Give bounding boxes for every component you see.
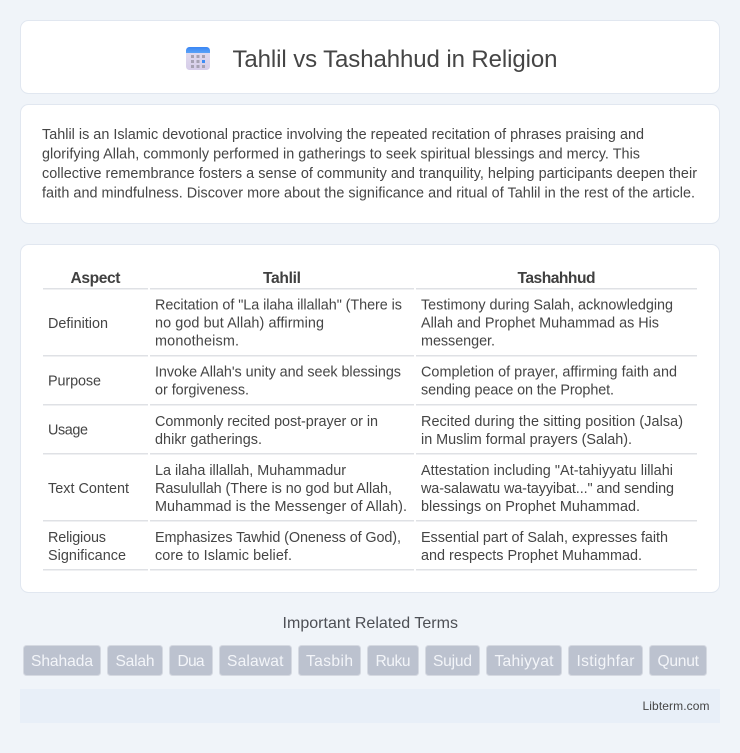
row: Usage: Commonly recited post-prayer or in [155,414,378,430]
intro text [42,127,697,202]
row: Religious Significance: Essential part of Salah, expresses faith [421,530,668,546]
tag: Ruku: Ruku [376,653,410,670]
tag: Salah [108,646,162,676]
tag: Salawat [220,646,292,676]
tag: Istighfar [568,646,642,676]
row: Definition: Allah and Prophet Muhammad as His [421,316,659,332]
row: Usage: dhikr gatherings. [155,432,262,448]
row: Definition: Recitation of "La ilaha illallah" (There is [155,298,402,314]
table header: Tahlil [263,270,301,287]
row: Usage: in Muslim formal prayers (Salah). [421,432,632,448]
footer credit: Libterm.com [642,699,710,713]
table header: Tashahhud [518,270,596,287]
row: Purpose: Completion of prayer, affirming faith and [421,364,677,380]
row: Definition: messenger. [421,334,495,350]
row: Purpose [43,364,697,406]
row: Usage [43,414,697,454]
row: Definition: Definition [48,316,108,332]
footer [20,689,720,723]
row: Text Content: Muhammad is the Messenger of Allah). [155,499,407,515]
tag: Dua: Dua [178,653,205,670]
row: Definition: no god but Allah) affirming [155,316,324,332]
tag: Ruku [368,646,418,676]
table header: Aspect [70,270,120,287]
row: Purpose: sending peace on the Prophet. [421,382,614,398]
panel: comparison table [20,244,720,592]
row: Usage: Recited during the sitting position (Jalsa) [421,414,683,430]
row: Religious Significance [43,530,697,570]
intro text: collective remembrance fosters a sense of community and tranquility, helping participants deepen their [42,166,697,182]
row: Religious Significance: Emphasizes Tawhid (Oneness of God), [155,530,401,546]
intro text: glorifying Allah, commonly performed in gatherings to seek spiritual blessings and mercy. This [42,146,640,162]
tag: Dua [170,646,212,676]
row: Definition: monotheism. [155,334,239,350]
tag: Sujud: Sujud [433,653,472,670]
tag: Qunut: Qunut [658,653,700,670]
row: Religious Significance: Significance [48,548,126,564]
row: Text Content: Rasulullah (There is no god but Allah, [155,481,392,497]
row: Definition: Testimony during Salah, acknowledging [421,298,673,314]
heading: related terms: Important Related Terms [282,615,458,632]
tag: Istighfar: Istighfar [576,653,634,670]
row: Text Content [43,463,697,522]
tag: Salah: Salah [116,653,154,670]
row: Purpose: Purpose [48,374,101,390]
tag: Tahiyyat [486,646,562,676]
row: Text Content: La ilaha illallah, Muhammadur [155,463,346,479]
tag: Tasbih: Tasbih [306,653,353,670]
panel: header [20,20,720,94]
title: Tahlil vs Tashahhud in Religion [232,46,558,73]
row: Purpose: Invoke Allah's unity and seek blessings [155,364,401,380]
tag: Salawat: Salawat [227,653,284,670]
intro text: faith and mindfulness. Discover more about the significance and ritual of Tahlil in the rest of the article. [42,186,695,202]
tag: Shahada: Shahada [31,653,93,670]
tag: Tasbih [298,646,360,676]
row: Religious Significance: and respects Prophet Muhammad. [421,548,642,564]
row: Text Content: blessings on Prophet Muhammad. [421,499,640,515]
intro text: Tahlil is an Islamic devotional practice involving the repeated recitation of phrases praising and [42,127,644,143]
panel: introduction [20,104,720,224]
table header [43,270,697,290]
tag: Shahada [24,646,100,676]
row: Purpose: or forgiveness. [155,382,249,398]
row: Text Content: wa-salawatu wa-tayyibat..." and sending [420,481,674,497]
tag: Qunut [650,646,706,676]
row: Usage: Usage [48,422,88,438]
row: Definition [43,298,697,356]
tag: Sujud [426,646,480,676]
row: Text Content: Attestation including "At-tahiyyatu lillahi [421,463,673,479]
icon: calendar [186,47,210,70]
row: Religious Significance: core to Islamic belief. [155,548,292,564]
related term tags [24,646,706,676]
row: Religious Significance: Religious [48,530,106,546]
tag: Tahiyyat: Tahiyyat [494,653,554,670]
row: Text Content: Text Content [48,481,129,497]
